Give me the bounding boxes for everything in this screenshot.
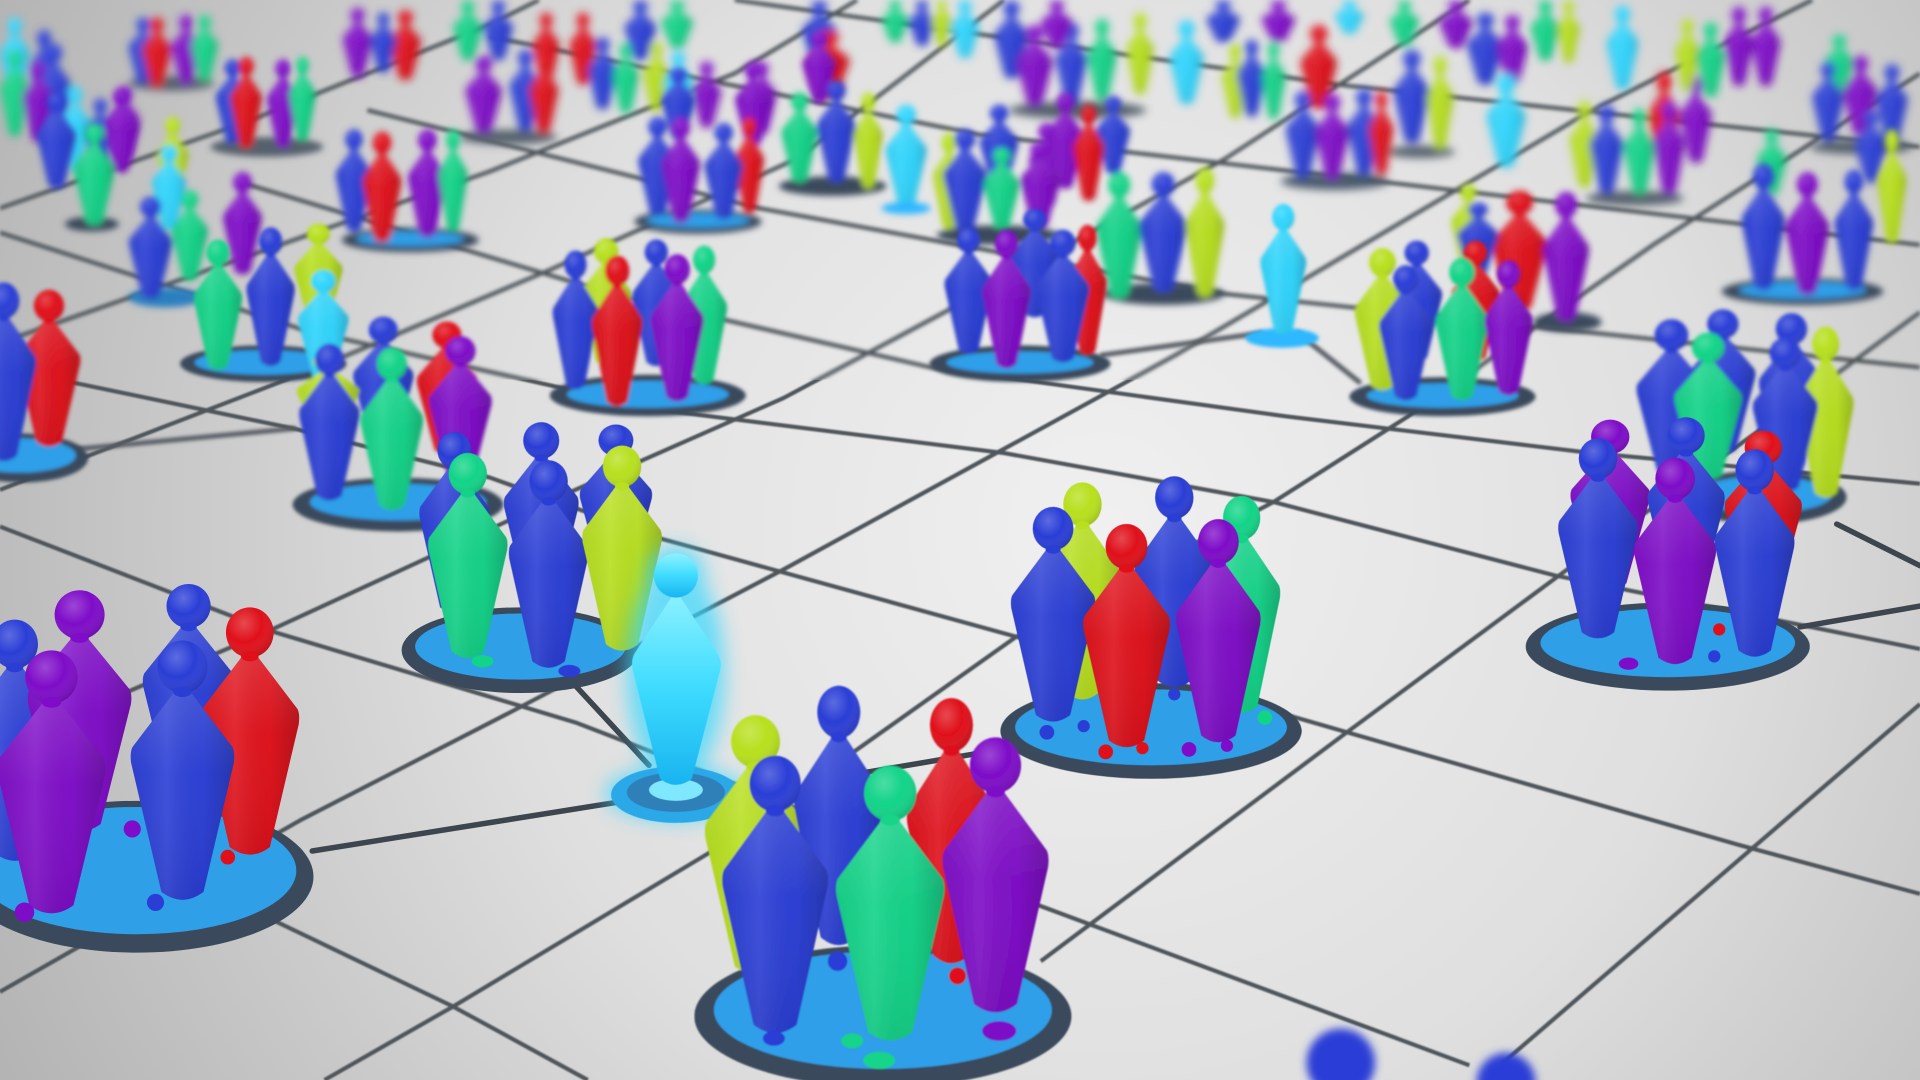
mid-distance crowds	[0, 204, 1853, 531]
grid lines, far	[0, 0, 1920, 380]
glowing disc	[611, 767, 741, 823]
group: bottom foreground	[694, 686, 1071, 1080]
group: left middle	[293, 317, 503, 531]
disc	[0, 801, 313, 953]
cyan figure, far	[886, 105, 927, 207]
glowing cyan figure	[605, 546, 747, 823]
disc	[1526, 602, 1810, 691]
glow	[605, 546, 747, 820]
cyan figure, center right	[1245, 204, 1319, 348]
small balls on disc	[1619, 623, 1725, 670]
group: right of center	[1349, 241, 1536, 416]
group: upper left with cyan figure	[180, 223, 349, 382]
cyan body and head	[632, 553, 721, 785]
group: left foreground	[0, 584, 313, 953]
small balls on disc	[471, 655, 580, 677]
blurred heads at bottom edge	[1307, 1029, 1536, 1080]
small balls on disc	[763, 951, 1016, 1069]
network connectors, far	[73, 333, 1359, 449]
group: center top	[550, 238, 746, 416]
group: right upper	[1637, 309, 1853, 524]
network connectors, near	[312, 524, 1920, 851]
far crowds, blurred	[0, 0, 1913, 206]
group: left-center foreground	[402, 422, 662, 693]
mid-far crowds with discs	[37, 31, 1906, 332]
disc	[694, 945, 1071, 1080]
grid lines, near	[0, 380, 1920, 1080]
disc	[1000, 683, 1302, 779]
group: far left edge	[0, 283, 88, 482]
group: center	[929, 209, 1111, 382]
group: right foreground	[1526, 417, 1810, 691]
small balls on disc	[1040, 688, 1272, 759]
disc	[402, 607, 639, 693]
group: center foreground	[1000, 476, 1302, 779]
small balls on disc	[15, 820, 235, 922]
